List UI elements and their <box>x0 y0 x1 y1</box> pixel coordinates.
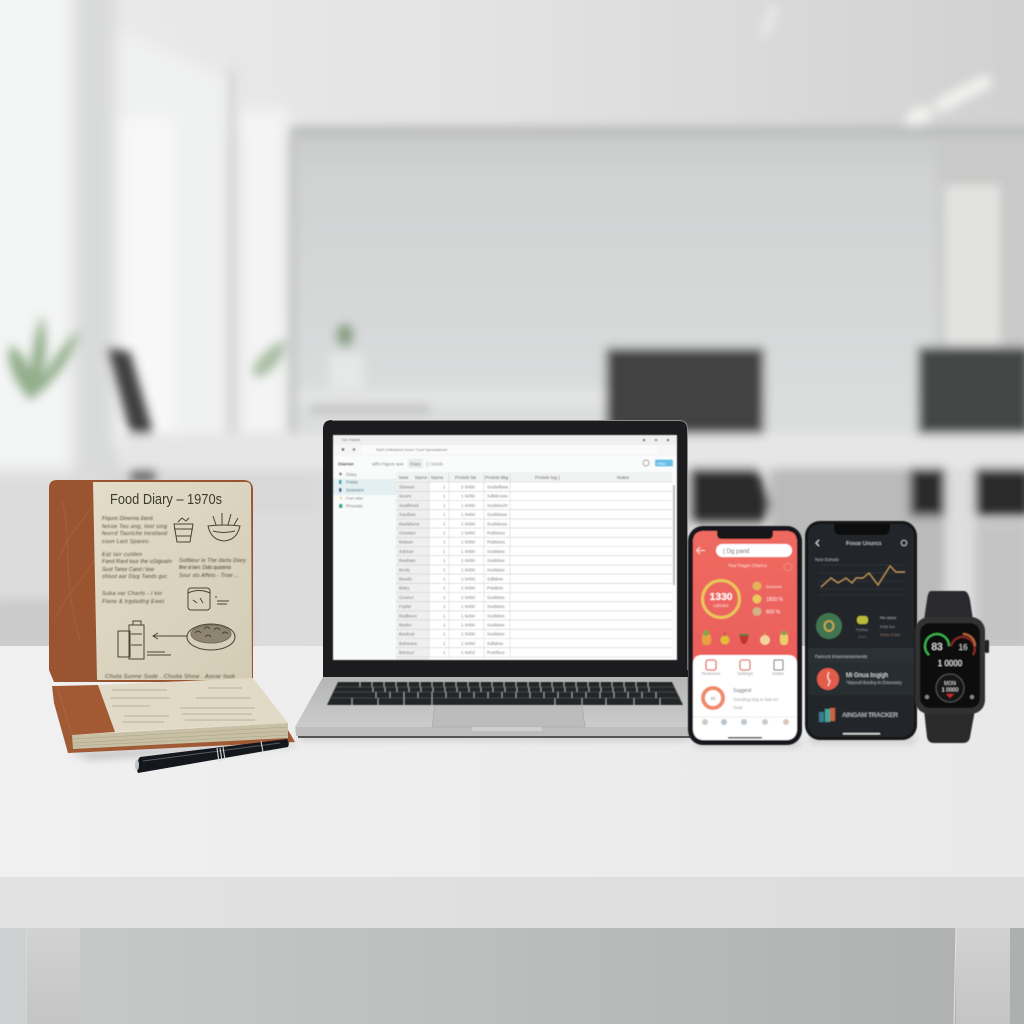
table rows: Gmulsin <box>399 530 416 536</box>
table rows: Sdlsbcsss <box>487 494 508 499</box>
table rows: 1 <box>443 613 446 618</box>
search pill: ( Dg pand <box>723 549 749 555</box>
screen title <box>816 540 907 547</box>
table rows: Bsdbsun <box>399 613 417 618</box>
watch screen <box>920 623 980 708</box>
handwritten notes on upper page: fine st lam. Dats quarena <box>179 565 231 571</box>
lower page leather strip <box>57 685 115 735</box>
table rows: 1 <box>443 484 446 490</box>
line chart <box>815 557 905 595</box>
sidebar <box>333 470 396 660</box>
white cards panel: 80 <box>710 696 716 701</box>
fountain pen <box>135 739 289 773</box>
avocado badge: Sum <box>858 635 866 639</box>
macro stats <box>752 582 784 616</box>
table rows: 1 6450 <box>461 586 475 591</box>
handwritten notes on upper page <box>102 516 246 680</box>
browser bar <box>333 435 677 456</box>
table rows: Bsufust <box>399 632 415 637</box>
section heading: Fareurs Insemanonments <box>815 654 868 659</box>
table rows: Bsnsun <box>399 650 415 655</box>
white desk top <box>0 646 1024 1024</box>
sketch: jar <box>188 588 229 610</box>
handwritten notes on upper page: Fiqure Dinerna iland. <box>102 516 154 522</box>
table rows <box>399 484 509 655</box>
sketch: bottles <box>118 621 171 659</box>
sidebar: Pasta <box>346 480 358 484</box>
app logo: AINGAM TRACKER <box>842 712 898 719</box>
calorie ring: 1330 <box>710 591 733 603</box>
table rows: Bstsun <box>399 540 413 545</box>
table rows: Bsafsan <box>399 558 416 563</box>
step count: 1 0000 <box>938 659 963 668</box>
handwritten notes on upper page: Sust Tanor Cand / tow <box>102 567 155 573</box>
table rows: 1 6450 <box>461 521 475 526</box>
table rows: Sodsbss <box>487 567 505 572</box>
bottom dial: 1 0000 <box>942 688 958 694</box>
laptop screen <box>333 435 677 660</box>
macro stats: 1800 % <box>766 597 784 603</box>
table rows: Sodsbss <box>487 632 505 637</box>
table rows: 1 6450 <box>461 494 475 499</box>
table rows: 1 6450 <box>461 549 475 554</box>
sketch: bowl <box>208 513 240 541</box>
table rows: Sodsbs20 <box>487 503 508 508</box>
table rows: 1 <box>443 530 446 536</box>
lower diary page <box>98 678 288 732</box>
white cards panel: Settings <box>737 671 754 676</box>
white cards panel: Trending ring to fast trn <box>733 697 779 702</box>
table rows: Sdrsun <box>399 549 414 554</box>
trackpad <box>432 705 585 727</box>
table rows: Fsplsi <box>399 604 411 609</box>
table rows: 1 <box>443 604 446 609</box>
handwritten notes on upper page: feiroe Teu ang, tool sing <box>102 524 167 530</box>
table rows: 1 5450 <box>461 540 475 545</box>
watch case <box>915 617 985 714</box>
table rows: 1 <box>443 549 446 554</box>
activity rings: 83 <box>931 642 943 653</box>
table rows: Sodsbuss <box>487 521 508 526</box>
table rows: Rostfscs <box>487 650 505 655</box>
table rows: 1 6450 <box>461 558 475 563</box>
handwritten notes on upper page: Sour sts Affets - Trow ... <box>179 573 239 579</box>
table rows: 1 6450 <box>461 604 475 609</box>
insight card: "Mpscall Bsnlng In Dtsnvoary <box>846 680 903 685</box>
table rows: 1 6450 <box>461 622 475 628</box>
table rows: 1 6450 <box>461 503 475 508</box>
table rows: Sautbss <box>399 512 416 517</box>
table header: Protein fat <box>455 475 477 480</box>
red phone: calorie app <box>688 526 802 745</box>
table rows: 1 <box>443 641 446 646</box>
activity rings <box>925 634 975 655</box>
handwritten notes on upper page: shlust aar Diyg Tands gur. <box>102 574 168 580</box>
table rows: Rddsbss <box>487 540 506 545</box>
table rows: 1 <box>443 586 446 591</box>
macro stats: 600 % <box>766 610 781 616</box>
calorie ring <box>702 580 740 618</box>
app toolbar: Diarion <box>338 462 354 466</box>
leather spine texture <box>55 500 94 640</box>
handwritten notes on upper page: Suba var Charts - I kin <box>102 591 162 597</box>
table rows: 1 6450 <box>461 613 475 618</box>
table rows: 1 <box>443 540 446 545</box>
activity rings: 16 <box>959 643 968 652</box>
table rows: 1 <box>443 595 446 600</box>
table rows: 1 <box>443 494 446 499</box>
table rows: 1 <box>443 622 446 628</box>
table rows: Sodsbss <box>487 549 505 554</box>
handwritten notes on upper page: coun Last Spares. <box>102 539 150 545</box>
table rows: 1 <box>443 512 446 517</box>
table header <box>399 475 630 480</box>
table rows: 1 <box>443 521 446 526</box>
food icons <box>702 630 788 645</box>
table rows: Pstsbss <box>487 586 504 591</box>
diary lower cover <box>52 686 295 753</box>
app toolbar <box>338 459 673 468</box>
sketch: food platter <box>187 624 235 650</box>
laptop notch <box>472 727 542 731</box>
table rows: Bcsly <box>399 567 411 572</box>
sidebar: Diary <box>346 472 357 477</box>
smartwatch <box>915 591 989 743</box>
table rows: Gnulun <box>399 595 414 600</box>
table header: Protein bkg <box>485 475 509 480</box>
table rows: Sdlsbss <box>487 641 504 646</box>
laptop with spreadsheet food log <box>295 420 690 738</box>
bottom dial <box>925 674 974 702</box>
table rows: 2 6450 <box>461 484 475 490</box>
handwritten notes on upper page: Chuta Sunne Sode . Chuita Show . Aovar Iook <box>105 674 236 680</box>
sidebar: Process <box>346 504 363 508</box>
handwritten notes on upper page: Fand Rard tour the oStgoahr <box>102 559 172 565</box>
back arrow <box>696 547 705 554</box>
line chart: New Sumate <box>815 557 840 562</box>
table rows: 1 6450 <box>461 512 475 517</box>
table rows: 1 <box>443 632 446 637</box>
avocado badge: Portion <box>856 628 868 632</box>
phone notch <box>834 524 890 535</box>
table header: Name <box>431 475 444 480</box>
table rows: 1 <box>443 576 446 582</box>
table rows: 1 5450 <box>461 632 475 637</box>
table rows: Bstry <box>399 586 410 591</box>
avocado badge: Rdds 5 fats <box>880 632 900 637</box>
diary title: Food Diary – 1970s <box>110 492 222 508</box>
avocado badge <box>816 613 900 639</box>
insight card <box>817 668 903 690</box>
table rows: Bahsuns <box>399 641 418 646</box>
table header: Notes <box>617 475 630 480</box>
paper food diary <box>49 480 295 773</box>
phone notch <box>717 531 773 539</box>
table rows: 1 6450 <box>461 567 475 572</box>
red header <box>693 531 797 668</box>
subtitle: Tear Rager Chance <box>728 563 768 568</box>
table rows: Rddsbss <box>487 530 506 536</box>
screen title: Fowar Ununcs <box>846 541 882 547</box>
blurred plant left <box>9 315 80 400</box>
table rows: Sealfresd <box>399 503 419 508</box>
keyboard <box>327 682 683 705</box>
spreadsheet table <box>396 472 675 660</box>
table rows: Sodsrllass <box>487 484 509 490</box>
white cards panel <box>693 655 797 740</box>
lower page faint notes <box>110 688 255 722</box>
handwritten notes on upper page: feurrd Tauriche trestland <box>102 531 168 537</box>
app toolbar: sill's Figure sue <box>372 462 404 466</box>
table rows: Sodsbss <box>487 604 505 609</box>
white cards panel: Setter <box>772 671 784 676</box>
handwritten notes on upper page: Flane & trgdadtrg Ewet <box>102 599 164 605</box>
sidebar: Seasons <box>346 488 365 492</box>
table rows: 1 5450 <box>461 530 475 536</box>
app toolbar: [ ] Ninds <box>426 462 444 466</box>
table rows: 1 6450 <box>461 641 475 646</box>
white cards panel: Suggest <box>733 688 752 694</box>
calorie ring: calories <box>713 603 729 608</box>
sketch: cup <box>174 518 193 542</box>
table rows: Badsbuns <box>399 521 420 526</box>
app logo <box>819 708 898 722</box>
app toolbar: Diary <box>410 462 421 466</box>
app toolbar: Filter <box>657 461 667 466</box>
diary back cover <box>49 480 253 682</box>
table rows: Sodsbss <box>487 622 505 628</box>
table rows: 1 <box>443 503 446 508</box>
sidebar: Fuel data <box>346 496 363 500</box>
table rows: Sodsbss <box>487 613 505 618</box>
table rows: Sodsbss <box>487 595 505 600</box>
browser bar: Start Unfinished Hours Tunel Spreadsheet <box>376 448 448 452</box>
insight card: Mi Gnua bsgigh <box>846 673 888 679</box>
handwritten notes on upper page: Sollbeur ie The darta Diary <box>179 558 246 564</box>
avocado badge: Rdfs fun <box>880 624 895 629</box>
browser bar: Dia Tracker <box>342 438 361 442</box>
table header: New <box>399 475 409 480</box>
laptop lid <box>323 420 688 677</box>
search pill <box>716 544 792 557</box>
avocado badge: Riv sides <box>880 615 896 620</box>
table rows: 1 <box>443 650 446 655</box>
table header: Protein log ) <box>535 475 560 480</box>
bottom dial: MON <box>944 681 956 687</box>
table header: Name <box>415 475 428 480</box>
blurred office background <box>0 0 1024 660</box>
table rows: Sdlsbss <box>487 576 504 582</box>
laptop base <box>295 677 690 737</box>
dark phone: analytics app <box>805 521 917 740</box>
watch strap <box>924 591 973 620</box>
white cards panel: Reserves <box>702 671 721 676</box>
diary page block edge <box>72 723 288 749</box>
table rows: 1 5450 <box>461 595 475 600</box>
table rows: Sodsbass <box>487 512 508 517</box>
bottom navigation <box>702 719 789 738</box>
macro stats: Nutrients <box>766 584 782 589</box>
table rows: Sodsbss <box>487 558 505 563</box>
handwritten notes on upper page: Eqt lair cutden <box>102 552 142 558</box>
table rows: Bsudn <box>399 576 412 582</box>
sketch: arrow and spoon <box>153 633 187 639</box>
upper diary page <box>93 482 252 680</box>
table rows: Bsdsn <box>399 622 412 628</box>
table rows: 1 <box>443 567 446 572</box>
white cards panel: Goal <box>733 705 742 710</box>
soft shadows under devices <box>70 734 915 760</box>
table rows: 1 <box>443 558 446 563</box>
table rows: 1 6402 <box>461 650 475 655</box>
table rows: 1 5450 <box>461 576 475 582</box>
table rows: Sours <box>399 494 412 499</box>
table rows: Sbesun <box>399 484 415 490</box>
